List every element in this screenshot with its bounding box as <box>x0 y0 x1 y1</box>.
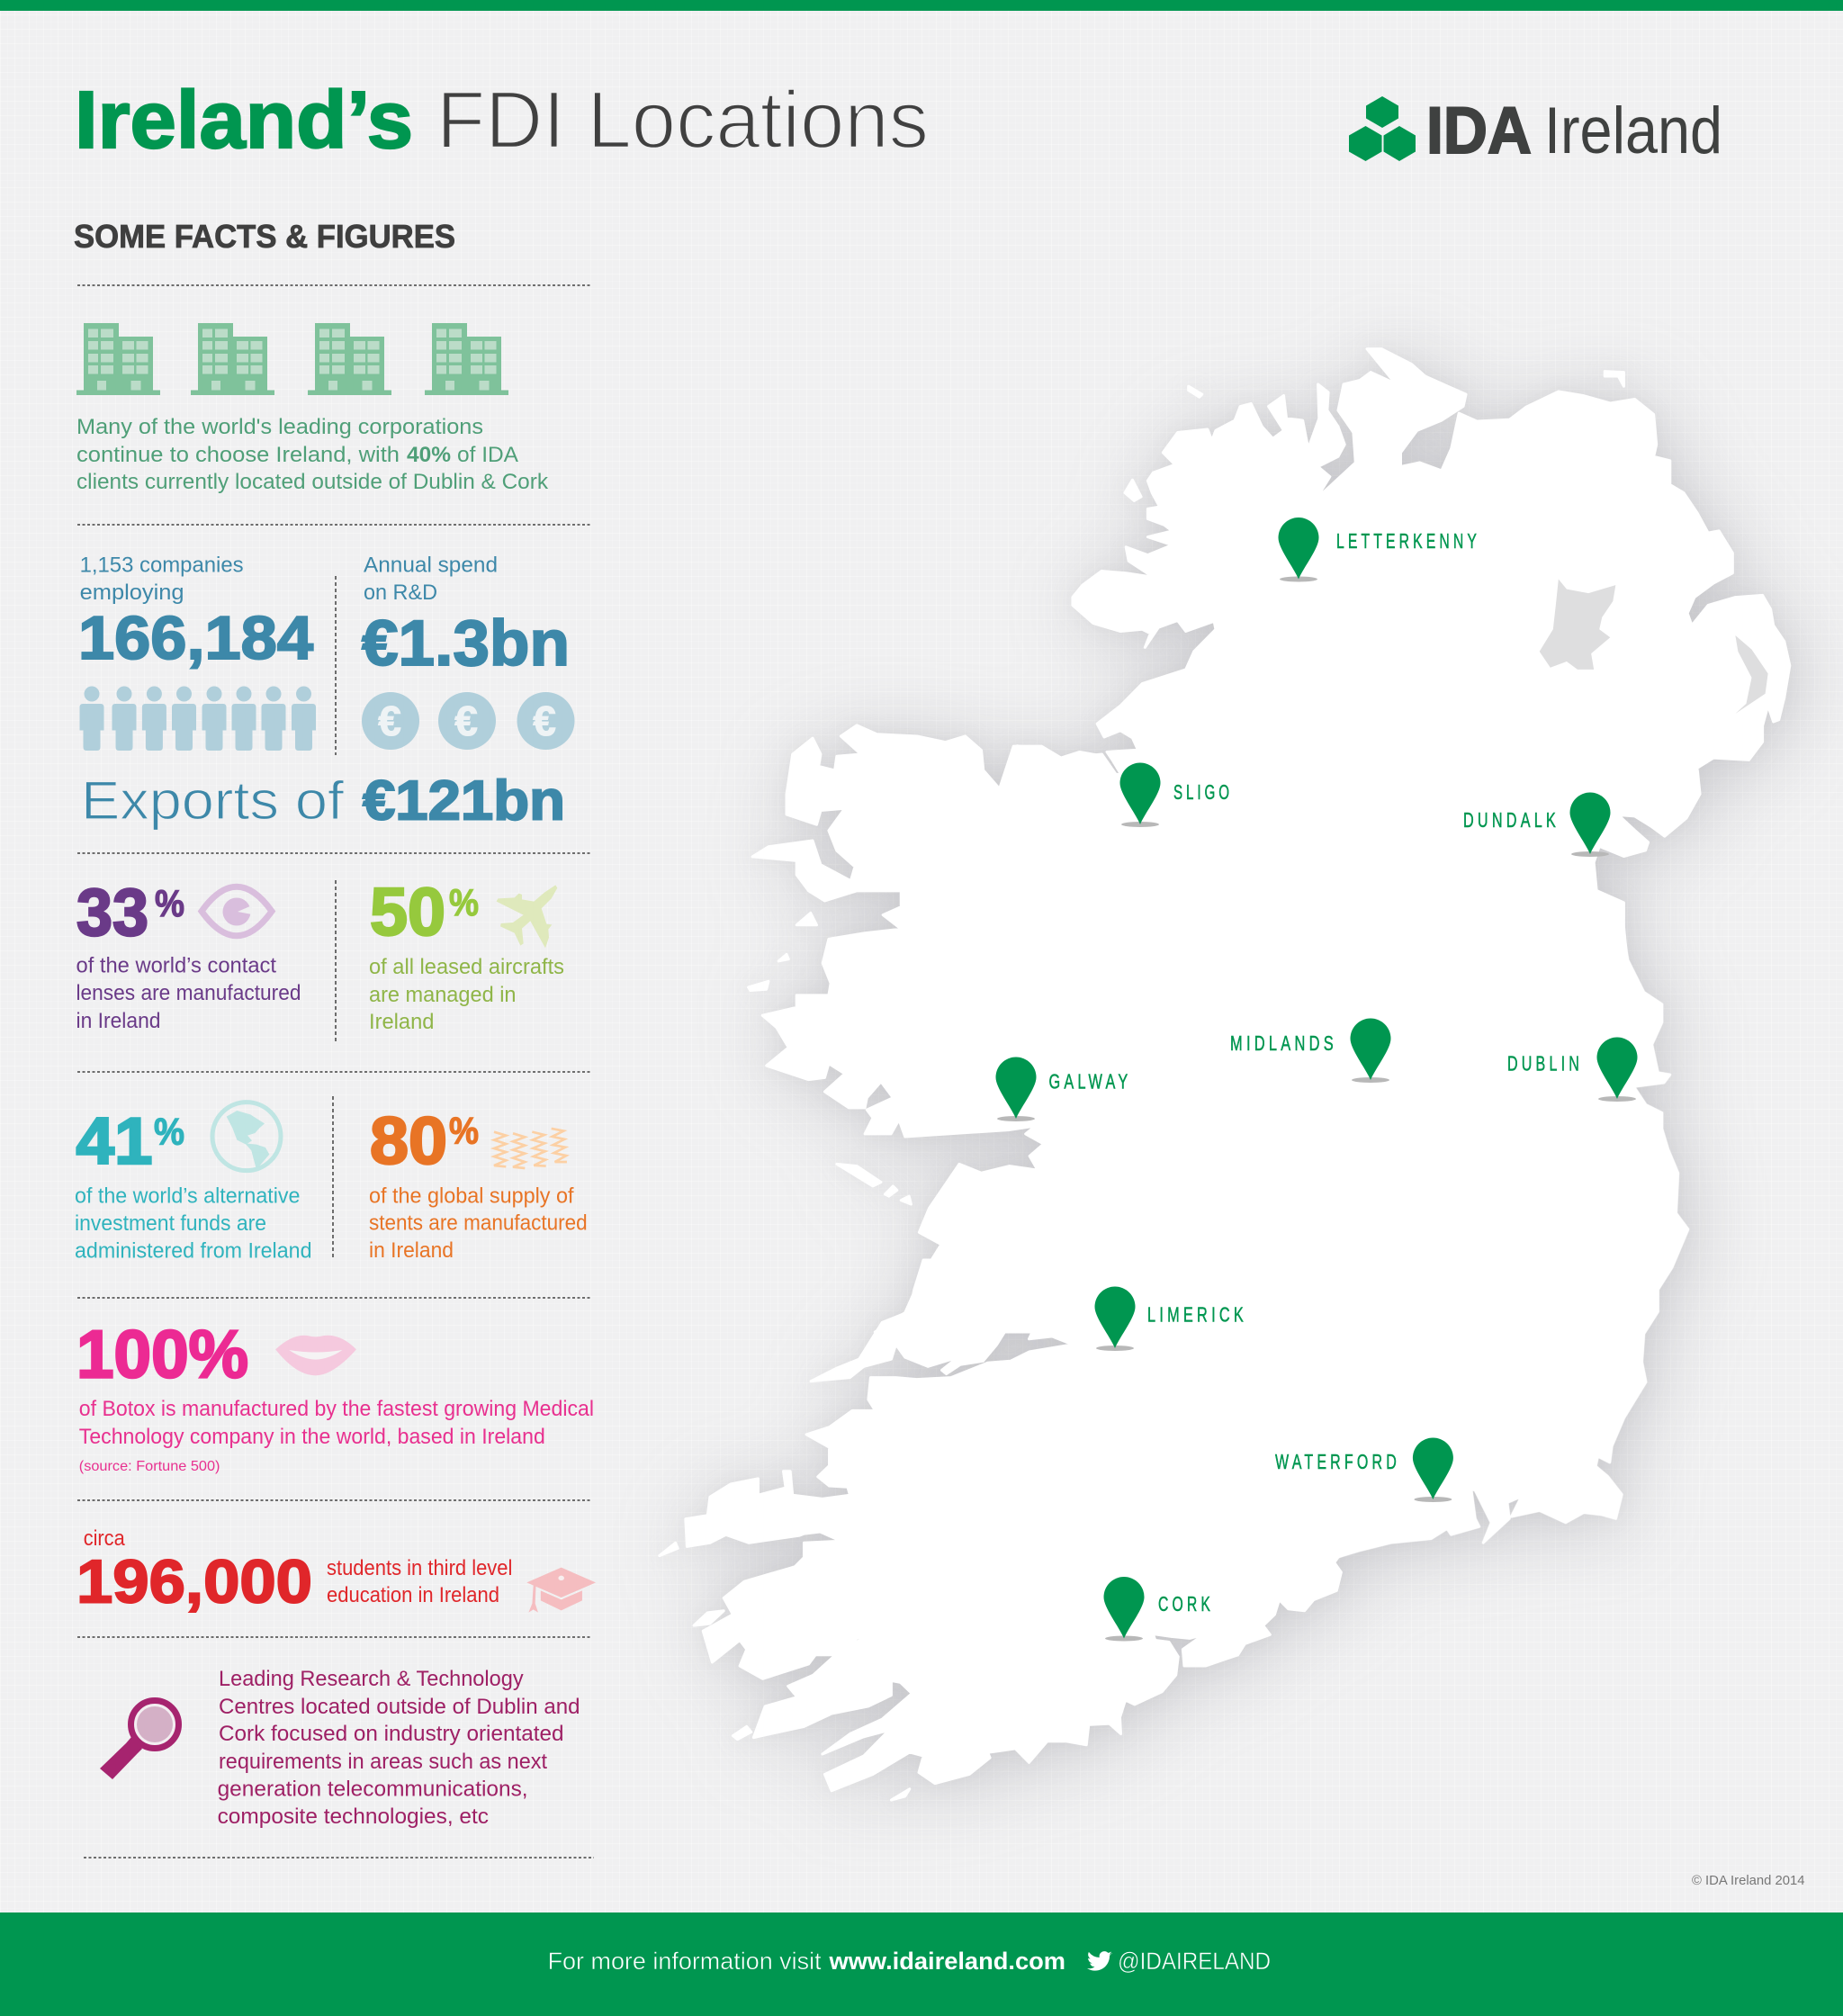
map pin: Waterford: WATERFORD <box>1275 1450 1400 1473</box>
panel: stents <box>369 1103 588 1263</box>
number: 41%: % <box>154 1111 184 1153</box>
map pin: Dundalk: DUNDALK <box>1463 808 1560 832</box>
panel: research centres <box>100 1667 580 1829</box>
icon: twitter bird <box>1087 1951 1112 1971</box>
number: 50%: 50 <box>370 874 445 950</box>
number: 100%: 100% <box>76 1317 248 1392</box>
icon: euro coins: € <box>454 698 478 744</box>
text: botox: Technology company in the world, based in Ireland <box>79 1425 545 1449</box>
text: annual spend: on R&D <box>364 580 437 605</box>
text: annual spend: Annual spend <box>364 553 498 578</box>
map pin: Letterkenny: LETTERKENNY <box>1336 529 1480 553</box>
panel: corporations <box>76 323 549 494</box>
icon: euro coins: € <box>533 698 556 744</box>
icon: euro coins <box>362 692 574 750</box>
text: corporations: 40% <box>407 443 451 467</box>
map pin: Galway: GALWAY <box>1049 1069 1132 1093</box>
logo: IDA Ireland <box>1349 94 1722 167</box>
number: 80%: 80 <box>370 1103 447 1178</box>
map pin: Letterkenny <box>1278 518 1480 581</box>
text: investment funds: administered from Ireland <box>75 1239 311 1264</box>
text: contact lenses <box>76 954 301 1033</box>
text: corporations: Many of the world's leading corporations <box>76 415 483 439</box>
text: investment funds: of the world’s alternative <box>75 1184 301 1209</box>
icon: magnifying glass <box>100 1701 178 1779</box>
icon: graduation cap <box>526 1568 596 1613</box>
text: exports: €121bn <box>363 770 565 832</box>
text: students <box>327 1556 512 1607</box>
number: 50% <box>370 874 479 950</box>
text: contact lenses: in Ireland <box>76 1009 160 1033</box>
text: stents: in Ireland <box>369 1238 454 1263</box>
panel: botox <box>76 1317 594 1474</box>
text: botox <box>79 1397 594 1474</box>
text: botox: (source: Fortune 500) <box>79 1459 220 1474</box>
text: annual spend <box>364 553 498 605</box>
map pin: Waterford <box>1275 1438 1453 1502</box>
text: companies employing <box>80 553 244 605</box>
icon: row of people <box>79 686 316 751</box>
text: exports: Exports of <box>81 770 344 831</box>
text: corporations: clients currently located outside of Dublin & Cork <box>76 470 549 494</box>
icon: office buildings <box>76 323 508 395</box>
icon: euro coins: € <box>378 698 401 744</box>
text: research centres: Centres located outside of Dublin and <box>219 1695 580 1719</box>
footer bar <box>0 1912 1843 2016</box>
map pin: Limerick <box>1094 1287 1247 1351</box>
text: website: www.idaireland.com <box>828 1948 1065 1975</box>
logo: IDA Ireland: IDA <box>1426 94 1532 167</box>
text: stents: stents are manufactured <box>369 1211 588 1236</box>
panel: employment <box>78 553 316 751</box>
icon: globe <box>212 1102 281 1171</box>
panel: R&D spend <box>362 553 574 750</box>
number: 166,184: 166,184 <box>78 604 313 672</box>
text: leased aircraft <box>369 955 564 1034</box>
text: companies employing: employing <box>80 580 184 605</box>
text: research centres: composite technologies, etc <box>218 1804 489 1829</box>
text: website <box>548 1948 1065 1975</box>
map pin: Dublin: DUBLIN <box>1507 1052 1583 1076</box>
map pin: Dundalk <box>1463 792 1611 857</box>
text: contact lenses: lenses are manufactured <box>76 981 301 1005</box>
map pin: Sligo <box>1119 763 1233 827</box>
map pin: Sligo: SLIGO <box>1173 780 1233 804</box>
map pin: Limerick: LIMERICK <box>1147 1303 1247 1327</box>
panel: contact lenses <box>76 875 301 1033</box>
number: 80% <box>370 1103 479 1178</box>
copyright: © IDA Ireland 2014 <box>1692 1873 1805 1888</box>
title: FDI Locations <box>436 76 929 166</box>
text: stents <box>369 1184 588 1263</box>
text: corporations: continue to choose Ireland, with <box>76 443 400 467</box>
map pin: Galway <box>995 1057 1132 1121</box>
text: research centres: Cork focused on industry orientated <box>219 1722 563 1746</box>
map of Ireland <box>660 349 1790 1800</box>
text: stents: of the global supply of <box>369 1184 574 1209</box>
text: investment funds <box>75 1184 311 1264</box>
text: leased aircraft: are managed in <box>369 983 517 1007</box>
title <box>75 76 929 166</box>
number: 41% <box>76 1105 184 1178</box>
map pin: Midlands <box>1230 1019 1391 1083</box>
text: exports <box>81 770 565 832</box>
icon: plane <box>497 885 557 948</box>
text: students: education in Ireland <box>327 1583 499 1607</box>
map pin: Dublin <box>1507 1037 1638 1102</box>
map pin: Cork <box>1103 1577 1214 1642</box>
title: Ireland’s <box>75 76 413 166</box>
text: research centres: requirements in areas such as next <box>219 1750 547 1774</box>
text: investment funds: investment funds are <box>75 1211 266 1236</box>
icon: eye <box>202 886 272 936</box>
number: 33%: 33 <box>76 875 148 950</box>
text: research centres <box>218 1667 580 1829</box>
number: 41%: 41 <box>76 1105 153 1178</box>
text: website: For more information visit <box>548 1948 822 1975</box>
text: research centres: generation telecommunications, <box>218 1778 528 1802</box>
number: 33% <box>76 875 184 950</box>
number: €1.3bn: €1.3bn <box>362 608 570 680</box>
strangford lough <box>1735 635 1768 714</box>
text: circa: circa <box>84 1526 125 1551</box>
text: research centres: Leading Research & Technology <box>219 1667 524 1691</box>
top green bar <box>0 0 1843 11</box>
lough neagh <box>1540 579 1615 670</box>
text: leased aircraft: Ireland <box>369 1010 434 1034</box>
number: 196,000: 196,000 <box>76 1548 312 1616</box>
map pin: Midlands: MIDLANDS <box>1230 1031 1337 1055</box>
panel: leased aircraft <box>369 874 564 1034</box>
logo: IDA Ireland: Ireland <box>1544 94 1722 167</box>
map pin: Cork: CORK <box>1158 1592 1214 1616</box>
text: corporations <box>76 415 549 494</box>
text: botox: of Botox is manufactured by the fastest growing Medical <box>79 1397 594 1421</box>
panel: investment funds <box>75 1102 311 1264</box>
number: 33%: % <box>155 882 184 924</box>
number: 80%: % <box>449 1110 479 1152</box>
text: corporations: of IDA <box>457 443 518 467</box>
panel: students <box>76 1526 596 1616</box>
icon: lips <box>275 1336 356 1375</box>
text: contact lenses: of the world’s contact <box>76 954 276 978</box>
icon: stents <box>494 1128 567 1168</box>
number: 50%: % <box>449 881 479 923</box>
text: companies employing: 1,153 companies <box>80 553 244 578</box>
text: students: students in third level <box>327 1556 512 1580</box>
heading: some facts and figures: SOME FACTS & FIGURES <box>74 218 455 255</box>
text: leased aircraft: of all leased aircrafts <box>369 955 564 979</box>
text: twitter handle: @IDAIRELAND <box>1118 1948 1271 1975</box>
